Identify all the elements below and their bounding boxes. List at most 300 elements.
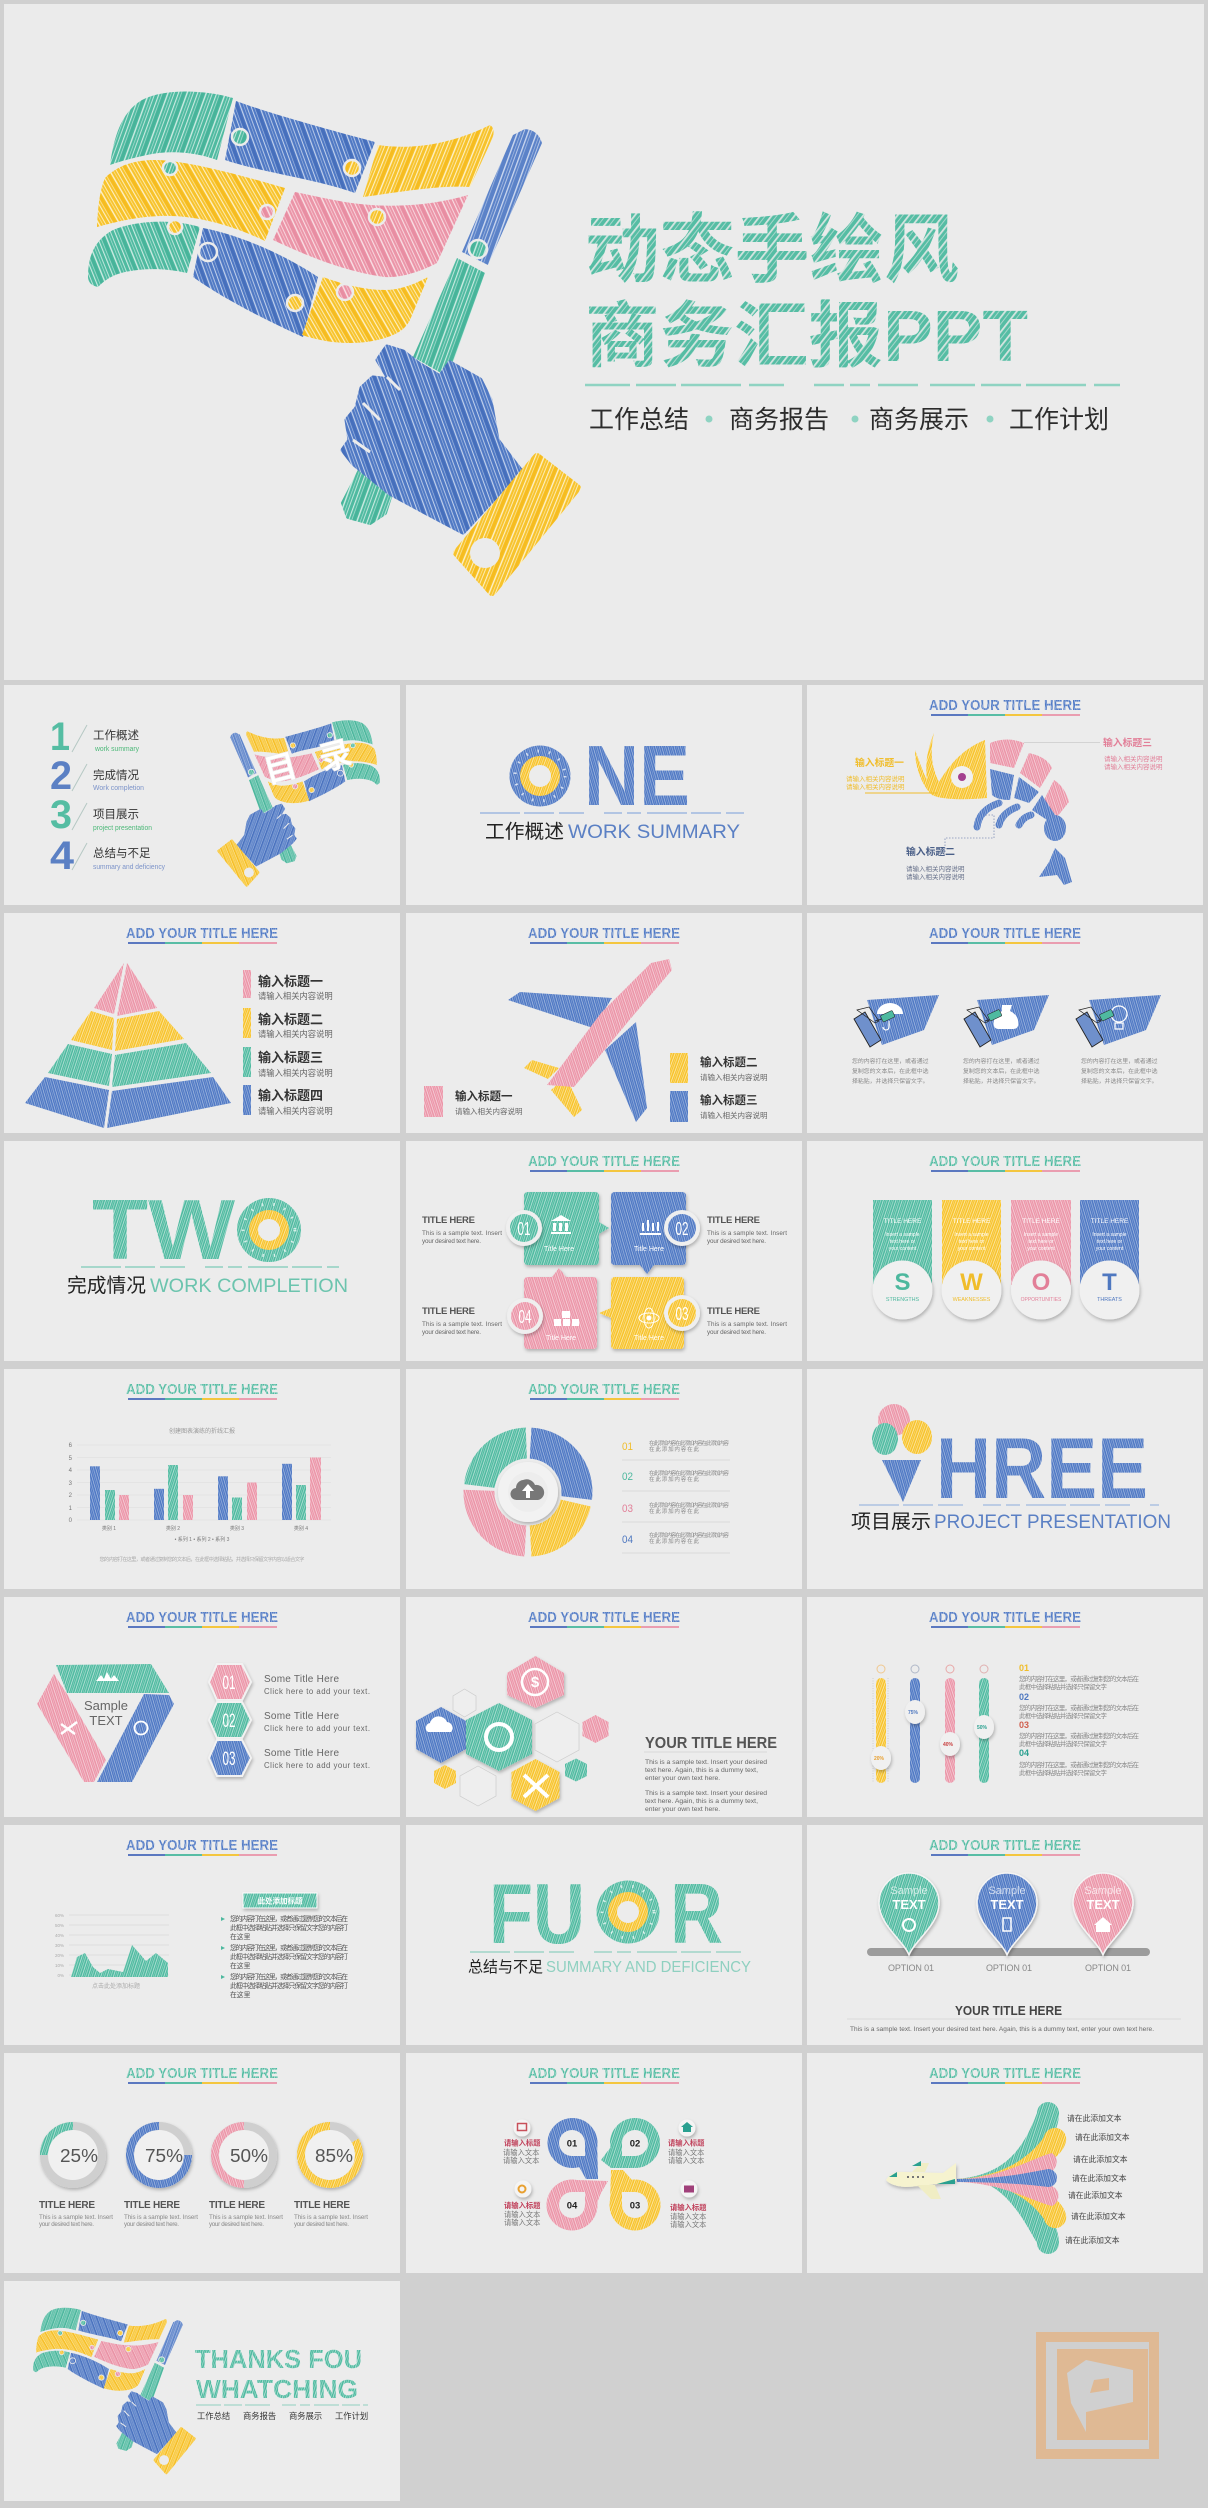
divider xyxy=(480,812,744,814)
impossible triangle xyxy=(37,1664,174,1782)
legend item one xyxy=(424,1086,522,1117)
slide title: ADD YOUR TITLE HERE xyxy=(929,697,1081,714)
SWOT card S: Insert a sample xyxy=(885,1232,920,1238)
panel: section FOUR xyxy=(406,1825,802,2045)
closing keywords: 商务展示 xyxy=(289,2411,322,2421)
ring 75 percent xyxy=(130,2126,188,2184)
section caption: 工作概述 xyxy=(485,821,564,843)
panel: hexagon cluster slide xyxy=(406,1597,802,1817)
SWOT card S: your content xyxy=(889,1246,917,1252)
panel: looped numbers slide xyxy=(406,2053,802,2273)
text block bottom left: TITLE HERE xyxy=(422,1306,475,1317)
SWOT card W xyxy=(942,1200,1002,1320)
fan of colored streams xyxy=(957,2102,1066,2254)
option labels: OPTION 01 xyxy=(986,1963,1032,1973)
label block left top xyxy=(503,2138,541,2165)
cover subtitle keywords: 工作计划 xyxy=(1009,406,1109,434)
text block bottom right: This is a sample text. Insert xyxy=(707,1321,787,1328)
slider 75 percent xyxy=(905,1665,925,1783)
label block left bottom xyxy=(504,2201,541,2227)
legend item one: 输入标题一 xyxy=(455,1089,513,1103)
big word ONE: NE xyxy=(584,729,690,824)
callout block 04 xyxy=(507,1268,597,1349)
bar chart: 2 xyxy=(69,1493,73,1499)
slider descriptions: 您的内容打在这里，或者通过复制您的文本后在 xyxy=(1019,1731,1140,1740)
slider descriptions: 您的内容打在这里，或者通过复制您的文本后在 xyxy=(1019,1760,1140,1769)
SWOT card T: T xyxy=(1102,1269,1117,1296)
section caption: WORK COMPLETION xyxy=(150,1275,348,1297)
legend item four xyxy=(243,1085,333,1116)
fan labels: 请在此添加文本 xyxy=(1068,2190,1123,2200)
slide title: ADD YOUR TITLE HERE xyxy=(126,1381,278,1398)
panel: section THREE xyxy=(807,1369,1203,1589)
bullet text: 此框中选择粘贴并选择只保留文字您的内容打 xyxy=(230,1952,348,1961)
bar chart: 类别 1 xyxy=(102,1525,116,1532)
slide title: ADD YOUR TITLE HERE xyxy=(528,1609,680,1626)
ring 25 percent: 25% xyxy=(60,2146,98,2166)
chart title: 创建图表演练的折线汇报 xyxy=(169,1427,235,1435)
fan labels: 请在此添加文本 xyxy=(1075,2132,1130,2142)
block three: 复制您的文本后，在此框中选 xyxy=(1081,1067,1158,1075)
SWOT card W: WEAKNESSES xyxy=(953,1297,991,1303)
pin two: Sample xyxy=(988,1885,1026,1897)
icon: airplane xyxy=(886,2161,956,2199)
bullet text xyxy=(221,1914,348,1999)
impossible triangle: TEXT xyxy=(89,1713,123,1728)
list item 02 xyxy=(209,1702,370,1738)
area chart: 10% xyxy=(55,1963,64,1968)
block one xyxy=(852,995,939,1085)
loop diagram: 03 xyxy=(630,2200,640,2212)
block one: 您的内容打在这里，或者通过 xyxy=(852,1057,929,1065)
bar chart: 类别 3 xyxy=(230,1525,244,1532)
text block top left xyxy=(422,1215,502,1245)
big word TWO xyxy=(92,1183,301,1278)
bullet text: 您的内容打在这里，或者通过复制您的文本后在 xyxy=(230,1914,348,1923)
illustration: airplane xyxy=(508,959,672,1122)
ring 50 percent: 50% xyxy=(230,2146,268,2166)
panel: triangle list slide xyxy=(4,1597,400,1817)
callout block 03: Title Here xyxy=(634,1335,664,1342)
label block left bottom: 请输入文本 xyxy=(504,2218,541,2227)
closing title: WHATCHING xyxy=(196,2374,358,2404)
big word ONE xyxy=(510,729,690,824)
panel: area chart slide xyxy=(4,1825,400,2045)
option labels: OPTION 01 xyxy=(1085,1963,1131,1973)
cover title: 动态手绘风 xyxy=(585,208,959,292)
SWOT card W: W xyxy=(960,1269,983,1296)
bar chart xyxy=(69,1443,331,1543)
slider descriptions: 02 xyxy=(1019,1692,1029,1702)
big word FUOR: R xyxy=(670,1867,723,1962)
loop diagram xyxy=(546,2118,660,2230)
text block top right: TITLE HERE xyxy=(707,1215,760,1226)
fan labels: 请在此添加文本 xyxy=(1067,2113,1122,2123)
SWOT card S: S xyxy=(894,1269,911,1296)
list item 01: Click here to add your text. xyxy=(264,1687,370,1696)
SWOT card S: text here or xyxy=(890,1239,915,1245)
contents list xyxy=(50,715,165,878)
slide title: ADD YOUR TITLE HERE xyxy=(528,925,680,942)
contents list: 完成情况 xyxy=(93,768,139,782)
slider 50 percent: 50% xyxy=(977,1725,988,1731)
ring captions: your desired text here. xyxy=(209,2221,264,2228)
section caption xyxy=(485,821,740,843)
label three xyxy=(1024,736,1163,771)
area chart: 40% xyxy=(55,1933,64,1938)
illustration: hand holding puzzle flag xyxy=(88,92,577,592)
SWOT card O: O xyxy=(1032,1269,1050,1296)
bar chart: 6 xyxy=(69,1443,73,1449)
slider descriptions: 01 xyxy=(1019,1663,1029,1673)
text block bottom left: This is a sample text. Insert xyxy=(422,1321,502,1328)
callout block 02: Title Here xyxy=(634,1246,664,1253)
slider 75 percent: 75% xyxy=(908,1710,919,1716)
panel: section TWO xyxy=(4,1141,400,1361)
label block right top: 请输入文本 xyxy=(668,2156,705,2165)
block two: 择粘贴，并选择只保留文字。 xyxy=(963,1077,1040,1085)
panel: location pins slide xyxy=(807,1825,1203,2045)
callout block 01: 01 xyxy=(518,1219,530,1239)
legend rows: 在此添加内容在此添加内容在此添加内容 xyxy=(649,1501,729,1509)
ring captions: TITLE HERE xyxy=(294,2200,350,2211)
slider descriptions: 此框中选择粘贴并选择只保留文字 xyxy=(1019,1768,1108,1777)
text block bottom right xyxy=(707,1306,787,1336)
pin one: Sample xyxy=(890,1885,928,1897)
ring captions: your desired text here. xyxy=(39,2221,94,2228)
icon: gear xyxy=(514,2180,532,2198)
fan labels: 请在此添加文本 xyxy=(1072,2173,1127,2183)
text block: This is a sample text. Insert your desired xyxy=(645,1790,767,1797)
contents list: summary and deficiency xyxy=(93,864,165,871)
text block: YOUR TITLE HERE xyxy=(645,1735,777,1752)
callout block 02 xyxy=(611,1192,700,1274)
slider 50 percent xyxy=(974,1665,994,1783)
cover subtitle keywords: 商务报告 xyxy=(729,406,829,434)
closing title xyxy=(195,2344,362,2404)
text block bottom right: TITLE HERE xyxy=(707,1306,760,1317)
closing keywords: 商务报告 xyxy=(243,2411,276,2421)
fan labels: 请在此添加文本 xyxy=(1065,2235,1120,2245)
area chart: 20% xyxy=(55,1953,64,1958)
contents list: 2 xyxy=(50,754,72,798)
SWOT card O: Insert a sample xyxy=(1024,1232,1058,1238)
label block right top: 请输入标题 xyxy=(668,2138,705,2148)
pin three xyxy=(1073,1873,1133,1955)
text block: text here. Again, this is a dummy text, xyxy=(645,1767,758,1774)
block three: 择粘贴，并选择只保留文字。 xyxy=(1081,1077,1158,1085)
legend rows: 03 xyxy=(622,1503,633,1515)
text block top left: TITLE HERE xyxy=(422,1215,475,1226)
list item 01 xyxy=(209,1664,370,1700)
baseline bar xyxy=(867,1948,1150,1956)
legend item two: 输入标题二 xyxy=(258,1012,323,1027)
SWOT card W: Insert a sample xyxy=(954,1232,989,1238)
block two: 您的内容打在这里，或者通过 xyxy=(963,1057,1040,1065)
label one xyxy=(846,756,937,794)
SWOT card T: THREATS xyxy=(1097,1297,1122,1303)
text block bottom right: your desired text here. xyxy=(707,1329,766,1336)
callout block 03: 03 xyxy=(676,1304,688,1324)
legend item two: 请输入相关内容说明 xyxy=(258,1029,333,1039)
legend item three: 请输入相关内容说明 xyxy=(258,1068,333,1078)
section caption: 项目展示 xyxy=(851,1511,931,1533)
slider 20 percent: 20% xyxy=(874,1756,885,1762)
label block right bottom xyxy=(670,2203,707,2229)
label block right top xyxy=(668,2138,705,2165)
closing keywords: 工作总结 xyxy=(197,2411,230,2421)
divider xyxy=(196,2404,368,2406)
panel: percentage rings slide xyxy=(4,2053,400,2273)
legend rows: 在此添加内容在此添加内容在此添加内容 xyxy=(649,1439,729,1447)
pin one: TEXT xyxy=(892,1897,926,1912)
SWOT card S xyxy=(872,1200,932,1320)
area chart: 0% xyxy=(57,1973,64,1978)
big word TWO: TW xyxy=(92,1183,236,1278)
label block left top: 请输入标题 xyxy=(504,2138,541,2148)
section caption: 完成情况 xyxy=(67,1275,146,1297)
SWOT card T: your content xyxy=(1096,1246,1124,1252)
closing keywords: 工作计划 xyxy=(335,2411,368,2421)
cover subtitle keywords: 工作总结 xyxy=(589,406,689,434)
option labels: OPTION 01 xyxy=(888,1963,934,1973)
closing keywords xyxy=(197,2411,368,2421)
list item 01: 01 xyxy=(222,1673,236,1694)
text block: text here. Again, this is a dummy text, xyxy=(645,1798,758,1805)
label block right bottom: 请输入标题 xyxy=(670,2203,707,2212)
SWOT card S: TITLE HERE xyxy=(884,1218,922,1225)
pin one xyxy=(879,1873,939,1955)
legend rows: 在此添加内容在此 xyxy=(649,1537,699,1545)
SWOT card S: STRENGTHS xyxy=(886,1297,920,1303)
slide title: ADD YOUR TITLE HERE xyxy=(126,1609,278,1626)
slider descriptions: 您的内容打在这里，或者通过复制您的文本后在 xyxy=(1019,1703,1140,1712)
text block top left: your desired text here. xyxy=(422,1238,481,1245)
ring captions: TITLE HERE xyxy=(124,2200,180,2211)
block three: 您的内容打在这里，或者通过 xyxy=(1081,1057,1158,1065)
divider xyxy=(81,1266,339,1268)
area chart: 60% xyxy=(55,1913,64,1918)
list item 03: 03 xyxy=(222,1749,236,1770)
text block bottom left: your desired text here. xyxy=(422,1329,481,1336)
legend rows: 04 xyxy=(622,1534,633,1546)
section caption: WORK SUMMARY xyxy=(568,821,740,843)
text block: This is a sample text. Insert your desired xyxy=(645,1759,767,1766)
label block right bottom: 请输入文本 xyxy=(670,2212,707,2221)
contents list: work summary xyxy=(94,746,139,753)
label three: 请输入相关内容说明 xyxy=(1104,754,1163,763)
callout button xyxy=(243,1893,317,1908)
slide title: ADD YOUR TITLE HERE xyxy=(929,1609,1081,1626)
label one: 输入标题一 xyxy=(855,756,904,769)
panel: vertical sliders slide xyxy=(807,1597,1203,1817)
icon: mail xyxy=(680,2180,698,2198)
ring 85 percent: 85% xyxy=(315,2146,353,2166)
contents list: 工作概述 xyxy=(93,729,139,742)
cover subtitle keywords: 商务展示 xyxy=(869,406,969,434)
big word FUOR: FU xyxy=(489,1867,585,1962)
block one: 复制您的文本后，在此框中选 xyxy=(852,1067,929,1075)
area chart: 30% xyxy=(55,1943,64,1948)
slide title: ADD YOUR TITLE HERE xyxy=(929,1837,1081,1854)
circular process chart xyxy=(479,1443,577,1541)
legend rows: 在此添加内容在此 xyxy=(649,1445,699,1453)
label one: 请输入相关内容说明 xyxy=(846,774,905,783)
label two: 请输入相关内容说明 xyxy=(906,864,965,873)
section caption xyxy=(67,1275,348,1297)
area chart: 50% xyxy=(55,1923,64,1928)
legend item three: 请输入相关内容说明 xyxy=(700,1110,768,1120)
contents list: project presentation xyxy=(93,825,152,832)
impossible triangle: Sample xyxy=(84,1698,128,1713)
bullet text: 在这里 xyxy=(230,1990,251,1999)
contents list: 1 xyxy=(50,715,70,759)
fan labels: 请在此添加文本 xyxy=(1071,2211,1126,2221)
slider 20 percent xyxy=(871,1665,891,1783)
cover subtitle keywords xyxy=(589,406,1109,434)
fan labels xyxy=(1065,2113,1130,2245)
SWOT card W: TITLE HERE xyxy=(953,1218,991,1225)
ring 25 percent xyxy=(44,2126,102,2184)
pin two xyxy=(977,1873,1037,1955)
contents list: Work completion xyxy=(93,785,144,792)
illustration: shrimp xyxy=(915,733,1072,885)
bar chart: 0 xyxy=(69,1518,73,1524)
legend item two xyxy=(243,1008,333,1039)
bar chart: 1 xyxy=(69,1506,73,1512)
slide title: ADD YOUR TITLE HERE xyxy=(126,1837,278,1854)
ring 75 percent: 75% xyxy=(145,2146,183,2166)
bullet text: 在这里 xyxy=(230,1961,251,1970)
ring captions: TITLE HERE xyxy=(209,2200,265,2211)
label three: 请输入相关内容说明 xyxy=(1104,762,1163,771)
slide title: ADD YOUR TITLE HERE xyxy=(126,925,278,942)
panel: bar chart slide xyxy=(4,1369,400,1589)
legend item three: 输入标题三 xyxy=(700,1093,758,1107)
SWOT card O: your content xyxy=(1027,1246,1055,1252)
contents list: 总结与不足 xyxy=(93,846,151,860)
slider descriptions xyxy=(1019,1663,1140,1777)
legend rows: 在此添加内容在此添加内容在此添加内容 xyxy=(649,1469,729,1477)
fan labels: 请在此添加文本 xyxy=(1073,2154,1128,2164)
area chart: 点击此处添加标题 xyxy=(92,1982,140,1990)
pin two: TEXT xyxy=(990,1897,1024,1912)
SWOT card W: your content xyxy=(958,1246,986,1252)
loop diagram: 04 xyxy=(567,2200,578,2212)
list item 03: Some Title Here xyxy=(264,1748,339,1759)
bar chart: 3 xyxy=(69,1481,73,1487)
panel: SWOT slide xyxy=(807,1141,1203,1361)
ring captions: your desired text here. xyxy=(294,2221,349,2228)
SWOT card T: text here or xyxy=(1097,1239,1122,1245)
bullet text: 此框中选择粘贴并选择只保留文字您的内容打 xyxy=(230,1923,348,1932)
SWOT card O: OPPORTUNITIES xyxy=(1021,1297,1062,1303)
icon: home xyxy=(678,2120,696,2136)
label block left bottom: 请输入标题 xyxy=(504,2201,541,2210)
legend rows: 在此添加内容在此 xyxy=(649,1475,699,1483)
panel: table of contents xyxy=(4,685,400,905)
section caption xyxy=(468,1958,751,1976)
list item 02: Click here to add your text. xyxy=(264,1724,370,1733)
ring captions: This is a sample text. Insert xyxy=(294,2214,368,2221)
chart note: 您的内容打在这里，或者通过复制您的文本后，在此框中选择粘贴，并选择只保留文字内容以适合文字 xyxy=(100,1555,304,1563)
legend rows: 在此添加内容在此添加内容在此添加内容 xyxy=(649,1531,729,1539)
label block left top: 请输入文本 xyxy=(503,2148,540,2157)
legend item one xyxy=(243,970,333,1001)
ring 85 percent xyxy=(301,2126,359,2184)
big word FUOR xyxy=(489,1867,723,1962)
bar chart: 类别 4 xyxy=(294,1525,308,1532)
legend item four: 请输入相关内容说明 xyxy=(258,1106,333,1116)
section caption: 总结与不足 xyxy=(468,1958,543,1976)
text block top right: This is a sample text. Insert xyxy=(707,1230,787,1237)
panel: section ONE xyxy=(406,685,802,905)
slide title: ADD YOUR TITLE HERE xyxy=(929,2065,1081,2082)
bullet text: 此框中选择粘贴并选择只保留文字您的内容打 xyxy=(230,1981,348,1990)
legend item three: 输入标题三 xyxy=(258,1050,323,1065)
legend item one: 请输入相关内容说明 xyxy=(258,991,333,1001)
cover title xyxy=(585,208,1028,377)
ring captions: This is a sample text. Insert xyxy=(209,2214,283,2221)
SWOT card O xyxy=(1011,1200,1071,1320)
SWOT card T xyxy=(1080,1200,1140,1320)
panel: shrimp puzzle slide xyxy=(807,685,1203,905)
cover title: 商务汇报PPT xyxy=(585,297,1028,377)
label two: 请输入相关内容说明 xyxy=(906,872,965,881)
legend item two: 输入标题二 xyxy=(700,1055,758,1069)
panel: circular process slide xyxy=(406,1369,802,1589)
label three: 输入标题三 xyxy=(1103,736,1152,749)
panel: thanks slide xyxy=(4,2281,400,2501)
hexagon cluster: $ xyxy=(531,1674,540,1691)
ring captions: This is a sample text. Insert xyxy=(124,2214,198,2221)
panel: three pencil blocks slide xyxy=(807,913,1203,1133)
list item 03 xyxy=(209,1740,370,1776)
ring captions: your desired text here. xyxy=(124,2221,179,2228)
text block top right xyxy=(707,1215,787,1245)
loop diagram: 01 xyxy=(567,2138,578,2150)
ring captions: TITLE HERE xyxy=(39,2200,95,2211)
cover divider xyxy=(585,384,1120,386)
panel: pyramid slide xyxy=(4,913,400,1133)
bottom text block: This is a sample text. Insert your desired text here. Again, this is a dummy text, enter your own text here. xyxy=(850,2026,1154,2033)
contents list: 项目展示 xyxy=(93,808,139,821)
label one: 请输入相关内容说明 xyxy=(846,782,905,791)
callout block 01 xyxy=(506,1192,609,1265)
slider descriptions: 03 xyxy=(1019,1720,1029,1730)
bar chart: 类别 2 xyxy=(166,1525,180,1532)
closing title: THANKS FOU xyxy=(195,2344,362,2374)
slide title: ADD YOUR TITLE HERE xyxy=(126,2065,278,2082)
bottom text block xyxy=(847,2003,1181,2033)
SWOT card O: text here or xyxy=(1028,1239,1054,1245)
illustration: flag in hand xyxy=(33,2308,194,2473)
slider 40 percent: 40% xyxy=(943,1742,954,1748)
panel: airplane slide xyxy=(406,913,802,1133)
panel: cover slide xyxy=(4,4,1204,680)
ring captions: This is a sample text. Insert xyxy=(39,2214,113,2221)
slide title: ADD YOUR TITLE HERE xyxy=(929,925,1081,942)
text block top left: This is a sample text. Insert xyxy=(422,1230,502,1237)
label block right top: 请输入文本 xyxy=(668,2148,705,2157)
legend rows: 02 xyxy=(622,1471,633,1483)
callout block 04: 04 xyxy=(518,1307,532,1327)
callout button: 此处添加标题 xyxy=(258,1896,303,1906)
slider descriptions: 此框中选择粘贴并选择只保留文字 xyxy=(1019,1682,1108,1691)
list item 01: Some Title Here xyxy=(264,1674,339,1685)
label two: 输入标题二 xyxy=(906,845,955,858)
legend rows xyxy=(622,1439,730,1553)
